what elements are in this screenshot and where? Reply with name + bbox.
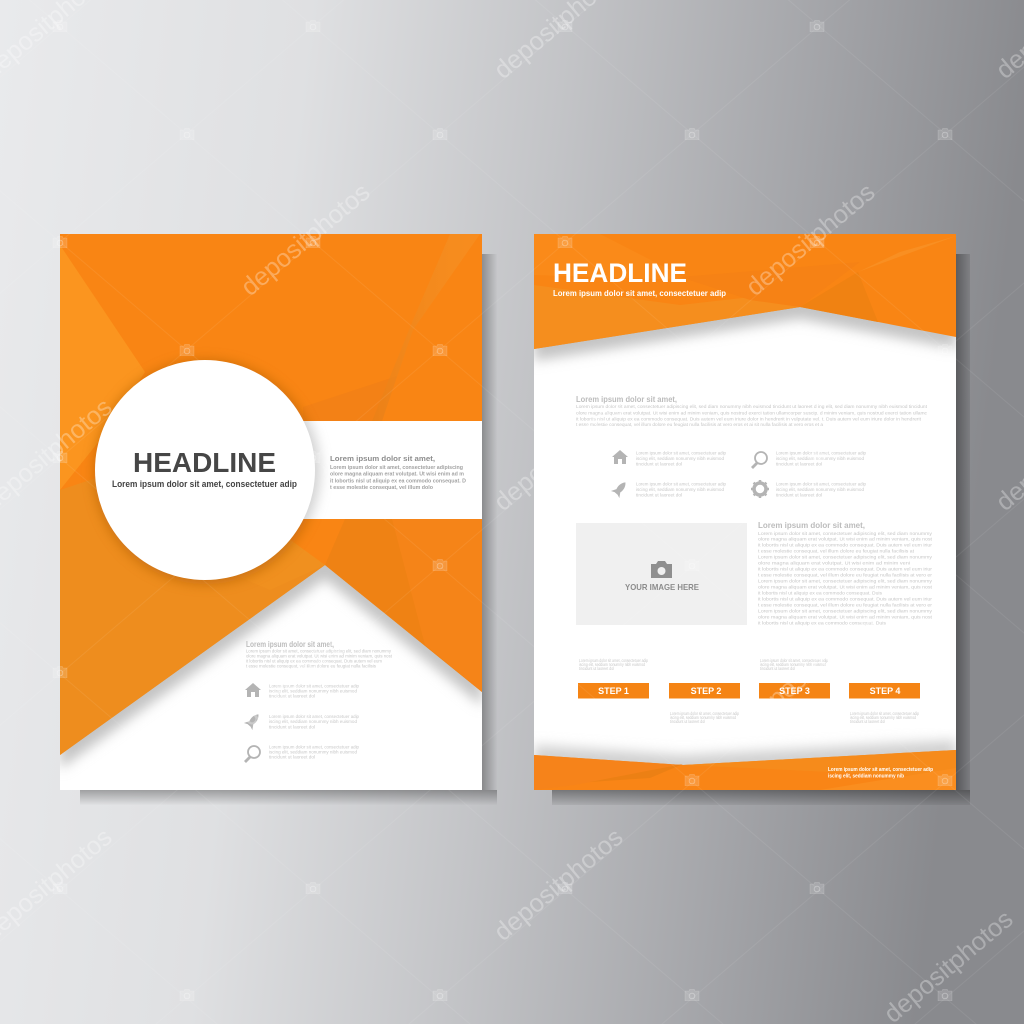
icon: home [245, 683, 261, 697]
long text column: olore magna aliquam erat volutpat. Ut wisi enim ad minim veni [758, 560, 910, 566]
long text column: t esse molestie consequat, vel illum dolore eu feugiat nulla facilisis at [758, 548, 915, 554]
icon: camera [651, 561, 672, 578]
band shadow cast by circle [304, 421, 326, 519]
cover orange background [60, 234, 482, 755]
panel: left brochure cover [60, 234, 482, 790]
step 4 note: Lorem ipsum dolor sit amet, consectetuer adip [850, 711, 920, 716]
footer shadow [534, 740, 956, 800]
icon: rocket [244, 714, 258, 730]
list item 2 text: iscing elit, seddiam nonummy nibh euismod [269, 719, 358, 724]
item text: home: Lorem ipsum dolor sit amet, consectetuer adip [636, 450, 727, 456]
long text column: it lobortis nisl ut aliquip ex ea commodo consequat. Duis [758, 620, 887, 626]
item text: home: tincidunt ut laoreet dol [636, 462, 682, 466]
footer text [828, 767, 933, 780]
list item 2 text: Lorem ipsum dolor sit amet, consectetuer adip [269, 714, 360, 719]
step 4 box [849, 683, 920, 698]
step 3 box [759, 683, 830, 698]
list item 1 text [269, 684, 359, 698]
lower text block: it lobortis nisl ut aliquip ex ea commodo consequat. Duis autem vel eum [246, 658, 382, 664]
step 2 box [669, 683, 740, 698]
white horizontal band [295, 421, 482, 519]
step 1 note [579, 658, 648, 670]
step 2 note: iscing elit, seddiam nonummy nibh euismod [670, 715, 737, 720]
watermark text: depositphotos [741, 178, 881, 302]
step 1 note: iscing elit, seddiam nonummy nibh euismod [579, 662, 646, 667]
item text: search: iscing elit, seddiam nonummy nibh euismod [776, 456, 865, 461]
intro text block [576, 394, 928, 427]
step 2 note [670, 711, 740, 724]
band text: olore magna aliquam erat volutpat. Ut wisi enim ad m [330, 472, 465, 478]
long text column: olore magna aliquam erat volutpat. Ut wisi enim ad minim veniam, quis nost [758, 584, 933, 590]
list item 3 text [269, 745, 359, 758]
header headline: HEADLINE [553, 258, 687, 288]
band text: Lorem ipsum dolor sit amet, [330, 454, 435, 463]
cover headline: HEADLINE [133, 447, 276, 478]
step 1 note: Lorem ipsum dolor sit amet, consectetuer adip [579, 658, 649, 663]
step 3 note: tincidunt ut laoreet dol [760, 666, 795, 671]
band text [330, 454, 466, 491]
step 3 note [760, 658, 828, 670]
lower text block [246, 639, 393, 668]
intro text block: t esse molestie consequat, vel illum dolore eu feugiat nulla facilisis at vero eros et ai sit nulla facilisis at vero eros et a [576, 422, 823, 427]
watermark text: depositphotos [489, 823, 629, 947]
item text: rocket: iscing elit, seddiam nonummy nibh euismod [636, 487, 725, 492]
watermark text: depositphotos [236, 608, 376, 732]
step 2 note: Lorem ipsum dolor sit amet, consectetuer adip [670, 711, 740, 716]
shadow of right page [552, 254, 970, 805]
footer orange shape [534, 750, 956, 790]
step 4 note [850, 711, 920, 724]
intro text block: olore magna aliquam erat volutpat. Ut wisi enim ad minim veniam, quis nostrud exerci tation ullamcorper suscip. d minim veniam, quis nostrud exerci tation ullamc [576, 410, 928, 416]
watermark text: depositphotos [489, 393, 629, 517]
long text column: Lorem ipsum dolor sit amet, [758, 520, 865, 530]
long text column: it lobortis nisl ut aliquip ex ea commodo consequat. Duis autem vel eum iriur [758, 596, 933, 602]
step 1 note: tincidunt ut laoreet dol [579, 666, 614, 671]
icon: gear [751, 480, 769, 498]
long text column: Lorem ipsum dolor sit amet, consectetuer adipiscing elit, sed diam nonummy [758, 608, 933, 614]
intro text block: Lorem ipsum dolor sit amet, consectetuer adipiscing elit, sed diam nonummy nibh euismod tincidunt ut laoreet d ing elit, sed diam nonummy nibh euismod tincidunt [576, 404, 928, 409]
watermark text: depositphotos [236, 178, 376, 302]
circle shadow [94, 360, 318, 584]
shadow under orange shape [60, 565, 482, 770]
step 3 box: STEP 3 [779, 686, 810, 696]
step 2 note: tincidunt ut laoreet dol [670, 719, 705, 724]
item text: rocket [636, 482, 726, 496]
lower text block: Lorem ipsum dolor sit amet, [246, 639, 334, 649]
intro text block: Lorem ipsum dolor sit amet, [576, 394, 677, 404]
lower text block: olore magna aliquam erat volutpat. Ut wisi enim ad minim veniam, quis nost [246, 654, 393, 658]
step 2 box: STEP 2 [691, 686, 721, 696]
lower text block: Lorem ipsum dolor sit amet, consectetuer adipiscing elit, sed diam nonummy [246, 648, 392, 654]
step 3 note: Lorem ipsum dolor sit amet, consectetuer adip [760, 658, 829, 663]
list item 3 text: tincidunt ut laoreet dol [269, 754, 315, 760]
item text: rocket: tincidunt ut laoreet dol [636, 492, 682, 498]
step 1 box [578, 683, 649, 698]
band text: t esse molestie consequat, vel illum dolo [330, 485, 433, 491]
long text column: Lorem ipsum dolor sit amet, consectetuer adipiscing elit, sed diam nonummy [758, 578, 933, 584]
footer text: iscing elit, seddiam nonummy nib [828, 774, 904, 780]
step 4 box: STEP 4 [870, 686, 900, 696]
placeholder caption: YOUR IMAGE HERE [625, 582, 699, 592]
step 3 note: iscing elit, seddiam nonummy nibh euismod [760, 662, 827, 667]
icon: magnifier [245, 746, 260, 762]
header subheadline: Lorem ipsum dolor sit amet, consectetuer adip [553, 289, 726, 298]
item text: rocket: Lorem ipsum dolor sit amet, consectetuer adip [636, 482, 727, 486]
list item 2 text [269, 714, 359, 728]
list item 2 text: tincidunt ut laoreet dol [269, 724, 315, 730]
item text: gear [776, 482, 866, 496]
icon: home [612, 450, 628, 464]
shadow of left page [80, 254, 497, 805]
long text column: it lobortis nisl ut aliquip ex ea commodo consequat. Duis [758, 590, 883, 596]
band text: Lorem ipsum dolor sit amet, consectetuer adipiscing [330, 465, 463, 471]
long text column: Lorem ipsum dolor sit amet, consectetuer adipiscing elit, sed diam nonummy [758, 531, 933, 536]
panel: right brochure page [534, 234, 956, 800]
item text: home [636, 451, 726, 466]
long text column: olore magna aliquam erat volutpat. Ut wisi enim ad minim veniam, quis nost [758, 536, 933, 542]
list item 3 text: iscing elit, seddiam nonummy nibh euismod [269, 750, 358, 754]
list item 1 text: Lorem ipsum dolor sit amet, consectetuer adip [269, 684, 360, 688]
long text column: olore magna aliquam erat volutpat. Ut wisi enim ad minim veniam, quis nost [758, 614, 933, 620]
watermark text: depositphotos [741, 608, 881, 732]
lower text block: t esse molestie consequat, vel illum dolore eu feugiat nulla facilisis [246, 664, 377, 668]
long text column: t esse molestie consequat, vel illum dolore eu feugiat nulla facilisis at vero er [758, 572, 933, 578]
step 4 note: iscing elit, seddiam nonummy nibh euismod [850, 715, 917, 720]
step 1 box: STEP 1 [598, 686, 629, 696]
icon: magnifier [752, 452, 767, 468]
white circle [95, 360, 315, 580]
icon: rocket [611, 482, 626, 498]
list item 3 text: Lorem ipsum dolor sit amet, consectetuer adip [269, 744, 360, 750]
item text: gear: iscing elit, seddiam nonummy nibh euismod [776, 487, 865, 492]
header shadow [534, 307, 956, 366]
cover subheadline: Lorem ipsum dolor sit amet, consectetuer adip [112, 479, 297, 489]
image placeholder [576, 523, 747, 625]
item text: home: iscing elit, seddiam nonummy nibh euismod [636, 456, 725, 461]
band text: it lobortis nisl ut aliquip ex ea commodo consequat. D [330, 478, 466, 484]
long text column [758, 520, 933, 626]
long text column: it lobortis nisl ut aliquip ex ea commodo consequat. Duis autem vel eum iriur [758, 542, 933, 548]
list item 1 text: iscing elit, seddiam nonummy nibh euismod [269, 688, 358, 694]
item text: gear: Lorem ipsum dolor sit amet, consectetuer adip [776, 482, 867, 486]
item text: search [776, 451, 866, 466]
header orange shape [534, 234, 956, 349]
intro text block: it lobortis nisl ut aliquip ex ea commodo consequat. Duis autem vel eum iriure dolor in hendrerit in vulputate vel. t. Duis autem vel eum iriure dolor in hendrerit [576, 416, 922, 422]
item text: search: tincidunt ut laoreet dol [776, 462, 822, 466]
footer text: Lorem ipsum dolor sit amet, consectetuer adip [828, 767, 933, 773]
item text: gear: tincidunt ut laoreet dol [776, 492, 822, 498]
long text column: t esse molestie consequat, vel illum dolore eu feugiat nulla facilisis at vero er [758, 602, 933, 608]
list item 1 text: tincidunt ut laoreet dol [269, 694, 315, 698]
item text: search: Lorem ipsum dolor sit amet, consectetuer adip [776, 450, 867, 456]
long text column: it lobortis nisl ut aliquip ex ea commodo consequat. Duis autem vel eum iriur [758, 566, 933, 572]
long text column: Lorem ipsum dolor sit amet, consectetuer adipiscing elit, sed diam nonummy [758, 554, 933, 560]
step 4 note: tincidunt ut laoreet dol [850, 719, 885, 724]
